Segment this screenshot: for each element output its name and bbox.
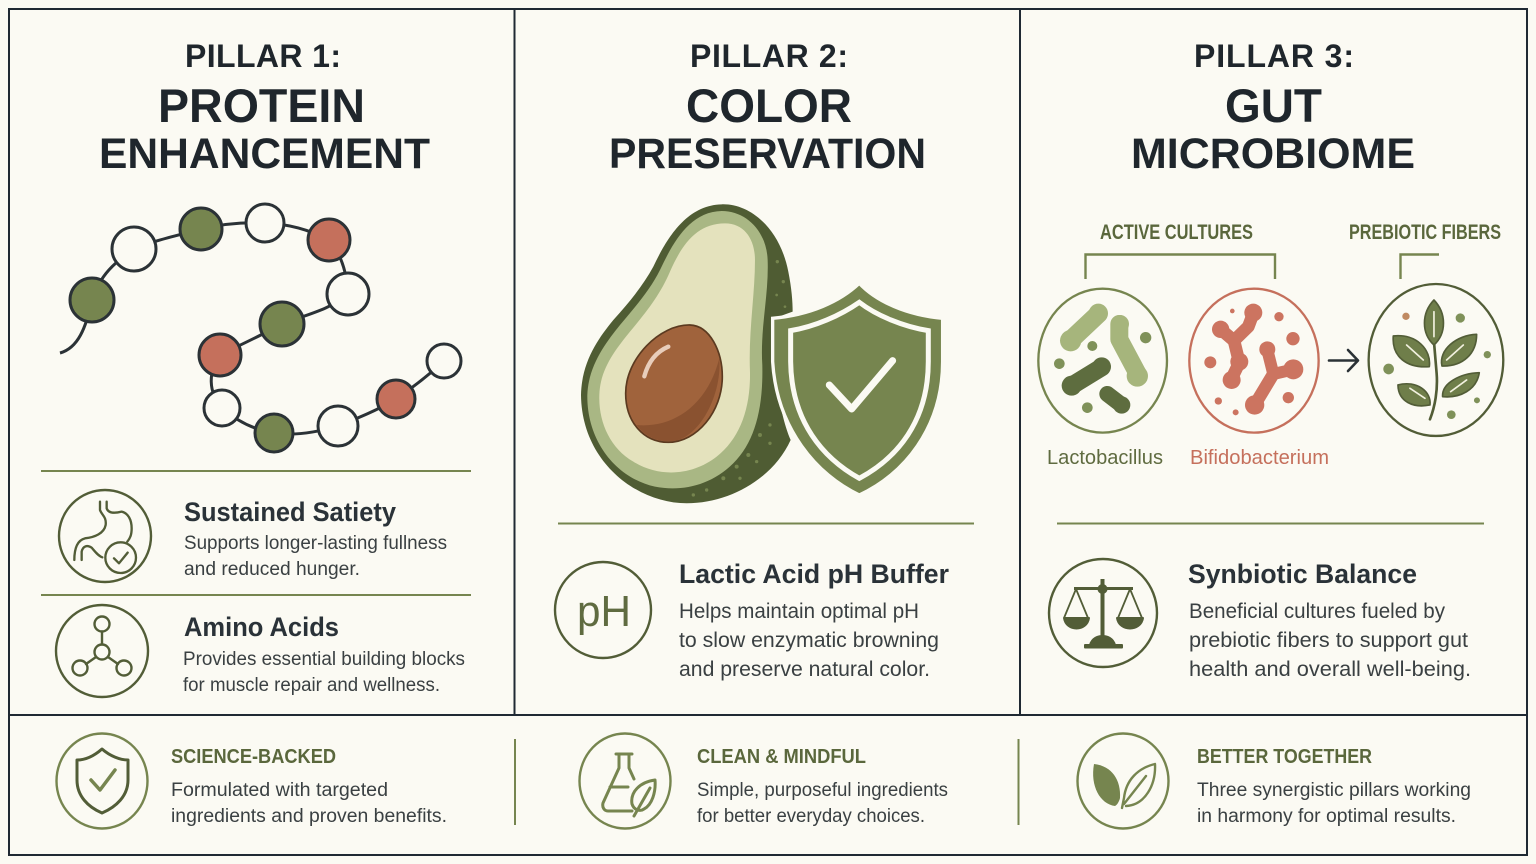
text: lactic acid pH buffer: Helps maintain optimal pH [679, 600, 919, 623]
text: sustained satiety: Supports longer-lasting fullness [184, 533, 447, 554]
text: amino acids: for muscle repair and wellness. [183, 675, 440, 696]
icon: stomach with check [59, 490, 151, 582]
heading: pillar 1 [99, 38, 430, 178]
icon: flask with leaf [580, 734, 670, 828]
heading: pillar 1: PROTEIN [158, 79, 365, 132]
text: clean and mindful [697, 746, 948, 827]
arrow [1329, 350, 1358, 371]
icon: amino acid molecule [56, 605, 148, 697]
icon: science-backed shield [56, 734, 148, 828]
illustration: amino acid chain [60, 204, 461, 452]
text: synbiotic balance: prebiotic fibers to support gut [1189, 629, 1468, 652]
panel: pillar 2 color preservation [555, 38, 974, 681]
heading: pillar 3: PILLAR 3: [1194, 38, 1354, 74]
footer band [56, 734, 1471, 828]
panel: pillar 1 protein enhancement [41, 38, 471, 697]
icon: lactobacillus circle [1038, 289, 1167, 433]
icon: two leaves [1078, 734, 1168, 828]
icon: pH: pH [577, 587, 631, 636]
illustration: avocado half with shield [581, 204, 943, 503]
text: synbiotic balance: health and overall well-being. [1189, 658, 1471, 681]
heading: pillar 1: PILLAR 1: [185, 38, 341, 74]
text: lactic acid pH buffer: Lactic Acid pH Buffer [679, 559, 949, 589]
text: synbiotic balance [1188, 559, 1471, 681]
text: amino acids: Provides essential building blocks [183, 649, 465, 670]
shield with check [773, 283, 943, 495]
heading: pillar 2 [609, 38, 926, 178]
label: active cultures [1086, 221, 1275, 279]
label: lactobacillus: Lactobacillus [1047, 447, 1163, 469]
icon: bifidobacterium circle [1189, 289, 1319, 433]
text: sustained satiety: and reduced hunger. [184, 559, 360, 580]
text: sustained satiety: Sustained Satiety [184, 497, 396, 527]
icon: pH [555, 562, 651, 658]
text: clean and mindful: Simple, purposeful ingredients [697, 780, 948, 801]
label: bifidobacterium: Bifidobacterium [1190, 447, 1329, 469]
heading: pillar 1: ENHANCEMENT [99, 130, 430, 178]
heading: pillar 2: COLOR [686, 79, 852, 132]
heading: pillar 3 [1131, 38, 1415, 178]
text: science-backed: SCIENCE-BACKED [171, 746, 336, 768]
text: better together: in harmony for optimal results. [1197, 806, 1456, 827]
label: prebiotic fibers [1349, 221, 1501, 279]
label: active cultures: ACTIVE CULTURES [1100, 221, 1253, 244]
text: sustained satiety [184, 497, 447, 580]
text: lactic acid pH buffer: to slow enzymatic browning [679, 629, 939, 652]
text: amino acids: Amino Acids [184, 612, 339, 642]
text: synbiotic balance: Synbiotic Balance [1188, 559, 1417, 589]
text: lactic acid pH buffer [679, 559, 949, 681]
text: clean and mindful: for better everyday choices. [697, 806, 925, 827]
heading: pillar 2: PILLAR 2: [690, 38, 848, 74]
heading: pillar 3: GUT [1225, 79, 1322, 132]
panel: pillar 3 gut microbiome [1038, 38, 1503, 681]
text: lactic acid pH buffer: and preserve natural color. [679, 658, 930, 681]
text: clean and mindful: CLEAN & MINDFUL [697, 746, 866, 768]
heading: pillar 2: PRESERVATION [609, 130, 926, 178]
text: better together: Three synergistic pillars working [1197, 780, 1471, 801]
avocado [581, 204, 793, 503]
text: science-backed: Formulated with targeted [171, 780, 388, 801]
text: amino acids [183, 612, 465, 696]
text: science-backed: ingredients and proven benefits. [171, 806, 447, 827]
text: better together: BETTER TOGETHER [1197, 746, 1372, 768]
text: synbiotic balance: Beneficial cultures fueled by [1189, 600, 1445, 623]
text: better together [1197, 746, 1471, 827]
text: science-backed [171, 746, 447, 827]
icon: balance scale [1049, 559, 1157, 667]
heading: pillar 3: MICROBIOME [1131, 130, 1415, 178]
icon: prebiotic plant circle [1369, 284, 1503, 436]
